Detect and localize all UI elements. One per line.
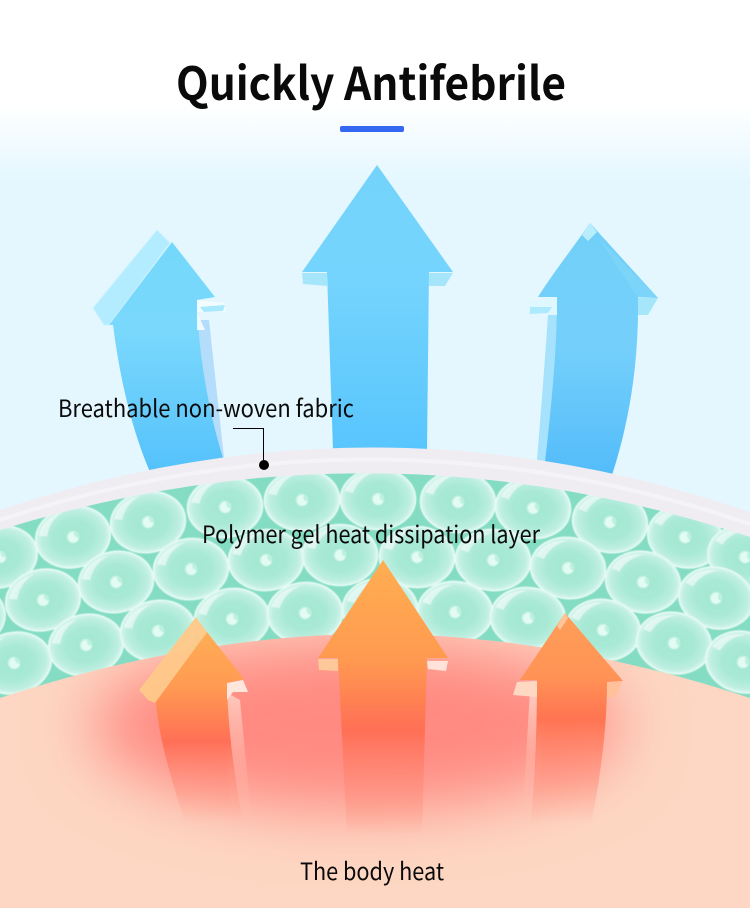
panel: polymer gel layer	[0, 468, 750, 701]
icon: right cooling arrow	[528, 223, 658, 475]
panel: body skin with heat	[0, 634, 750, 908]
leader line and dot	[233, 428, 269, 470]
label: body heat: The body heat	[300, 852, 444, 887]
icon: left heat arrow	[139, 617, 252, 840]
body heat glow	[90, 640, 620, 810]
icon: left cooling arrow	[93, 230, 226, 472]
label: polymer gel layer: Polymer gel heat dissipation layer	[202, 515, 541, 550]
title underline	[340, 126, 404, 132]
icon: right heat arrow	[513, 613, 623, 830]
label: breathable non-woven fabric: Breathable non-woven fabric	[58, 389, 354, 424]
title: Quickly Antifebrile	[176, 48, 566, 114]
panel: breathable fabric layer	[0, 447, 750, 537]
gel bubbles	[0, 468, 750, 701]
icon: centre cooling arrow	[302, 165, 453, 450]
icon: centre heat arrow	[318, 560, 448, 835]
